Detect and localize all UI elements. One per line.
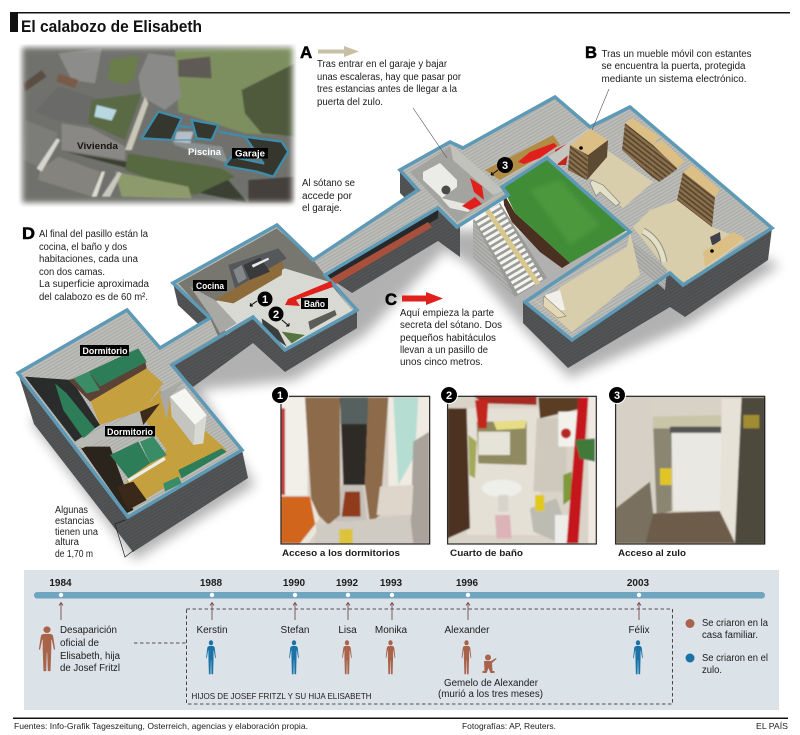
child: Lisa: Lisa [338, 625, 357, 636]
child: Félix: Félix [628, 625, 650, 636]
exterior walls [18, 170, 772, 552]
child: Kerstin: Kerstin [196, 625, 228, 636]
years [49, 578, 650, 589]
label: Piscina: Piscina [188, 147, 222, 157]
badge 3 [608, 386, 626, 404]
arrow: kitchen red [285, 281, 333, 306]
legend: zulo. [702, 665, 722, 676]
note D [22, 224, 149, 303]
laundry room with washer [410, 143, 503, 222]
photo 3: access to the hidden cell [608, 386, 765, 544]
dormitories [25, 348, 227, 513]
note D: cocina, el baño y dos [39, 242, 127, 253]
child: Monika: Monika [375, 625, 408, 636]
building interior and walls [18, 97, 772, 517]
badge 2: 2 [446, 390, 452, 402]
note B: Tras un mueble móvil con estantes [602, 49, 752, 60]
height note: de 1,70 m [55, 549, 93, 560]
disappearance text: de Josef Fritzl [60, 663, 120, 674]
bed: right wall [163, 448, 227, 492]
marker 1 on plan: 1 [262, 294, 268, 306]
years: 1993 [380, 578, 403, 589]
child: Stefan [281, 625, 309, 674]
shelf: movable door [568, 129, 608, 180]
blue wall tops [18, 97, 772, 517]
disappearance text [60, 625, 120, 674]
child: Stefan: Stefan [281, 625, 309, 636]
twin caption: Gemelo de Alexander [444, 678, 539, 689]
year dots [59, 593, 641, 597]
group caption: HIJOS DE JOSEF FRITZL Y SU HIJA ELISABETH [192, 691, 372, 701]
arrow: red [402, 292, 443, 305]
footer: EL PAÍS [756, 721, 788, 731]
partition wall [75, 412, 142, 448]
floor plan: cutaway of the basement [18, 89, 780, 560]
caption 1: Acceso a los dormitorios [282, 548, 400, 559]
note B: mediante un sistema electrónico. [602, 74, 746, 85]
twin caption: (murió a los tres meses) [438, 689, 543, 700]
twin caption [438, 678, 543, 700]
note D: La superficie aproximada [39, 279, 149, 290]
height note: altura [55, 537, 79, 548]
dashed group box [134, 609, 672, 704]
panel: timeline [24, 570, 779, 710]
badge 2 [440, 386, 458, 404]
timeline bar [34, 592, 765, 598]
height note: Algunas [55, 505, 88, 516]
badge 1: 1 [277, 390, 283, 402]
child: Kerstin [196, 625, 228, 674]
note C [385, 290, 502, 368]
label: Vivienda: Vivienda [77, 141, 119, 151]
child: Lisa [338, 625, 357, 674]
marker 3 on plan [491, 157, 513, 175]
legend [686, 618, 768, 676]
height note: estancias [55, 516, 94, 527]
note: garage access [302, 178, 355, 214]
years: 1992 [336, 578, 359, 589]
title: El calabozo de Elisabeth [21, 18, 202, 36]
note C: C [385, 290, 397, 309]
note C: llevan a un pasillo de [400, 345, 488, 356]
corridor red stripe [325, 208, 438, 284]
legend: casa familiar. [702, 630, 758, 641]
staircase [473, 203, 547, 300]
aerial photo of the house [2, 27, 315, 223]
title [0, 0, 800, 38]
note A: Tras entrar en el garaje y bajar [317, 59, 448, 70]
note B: se encuentra la puerta, protegida [602, 61, 746, 72]
legend: Se criaron en el [702, 653, 768, 664]
years: 1988 [200, 578, 223, 589]
note: garage access: el garaje. [302, 203, 342, 214]
note A [300, 43, 462, 108]
years: 1984 [49, 578, 72, 589]
marker 2 on plan [268, 306, 289, 326]
caption 2: Cuarto de baño [450, 548, 523, 559]
label: Dormitorio lower: Dormitorio [107, 427, 154, 437]
note D: habitaciones, cada una [39, 254, 138, 265]
note A: A [300, 43, 312, 62]
marker 3 on plan: 3 [502, 160, 508, 172]
note B: B [585, 43, 597, 62]
child: Monika [375, 625, 408, 674]
note C: Aquí empieza la parte [400, 308, 494, 319]
wardrobe [160, 380, 207, 445]
bed: lower room [110, 437, 167, 481]
bed: left wall [55, 383, 95, 438]
lower room [530, 232, 640, 332]
height note: tienen una [55, 527, 98, 538]
disappearance text: Elisabeth, hija [60, 651, 120, 662]
footer [13, 718, 788, 731]
kitchen and bathroom [178, 228, 353, 348]
label: Garaje: Garaje [235, 148, 265, 158]
year arrows [59, 602, 641, 620]
note A: tres estancias antes de llegar a la [317, 84, 457, 95]
note B [585, 43, 752, 85]
disappearance text: Desaparición [60, 625, 117, 636]
garage corridor room [485, 127, 595, 180]
note D: del calabozo es de 60 m². [39, 292, 148, 303]
note C: unos cinco metros. [400, 357, 483, 368]
label: Baño: Baño [304, 299, 325, 309]
photo 1: access to bedrooms [272, 386, 430, 544]
note D: D [22, 224, 35, 243]
photo 2: bathroom [440, 386, 597, 544]
note D: Al final del pasillo están la [39, 229, 148, 240]
years: 1990 [283, 578, 306, 589]
leader lines [413, 89, 609, 158]
footer: Fuentes: Info-Grafik Tageszeitung, Osterreich, agencias y elaboración propia. [14, 721, 308, 731]
note A: unas escaleras, hay que pasar por [317, 72, 462, 83]
child: Félix [628, 625, 650, 674]
office room [627, 165, 745, 290]
note: garage access: Al sótano se [302, 178, 355, 189]
label: Cocina: Cocina [196, 281, 225, 291]
label: Dormitorio upper: Dormitorio [82, 346, 128, 356]
footer: Fotografías: AP, Reuters. [462, 721, 556, 731]
caption 3: Acceso al zulo [618, 548, 686, 559]
child: Alexander [444, 625, 490, 674]
marker 2 on plan: 2 [273, 309, 279, 321]
child: Alexander: Alexander [444, 625, 490, 636]
bed: upper room [68, 348, 147, 402]
years: 1996 [456, 578, 479, 589]
disappearance text: oficial de [60, 638, 99, 649]
baby twin [482, 654, 497, 673]
Elisabeth figure [39, 626, 55, 671]
note A: puerta del zulo. [317, 97, 383, 108]
note C: secreta del sótano. Dos [400, 320, 502, 331]
room with shelves [568, 118, 685, 227]
badge 3: 3 [614, 390, 620, 402]
grass over the garden [502, 160, 627, 268]
marker 1 on plan [250, 292, 272, 306]
arrow: tan [318, 46, 359, 57]
badge 1 [272, 386, 288, 404]
years: 2003 [627, 578, 650, 589]
note: garage access: accede por [302, 191, 353, 202]
note D: con dos camas. [39, 267, 105, 278]
height note [55, 505, 134, 560]
note C: pequeños habitáculos [400, 333, 496, 344]
legend: Se criaron en la [702, 618, 768, 629]
